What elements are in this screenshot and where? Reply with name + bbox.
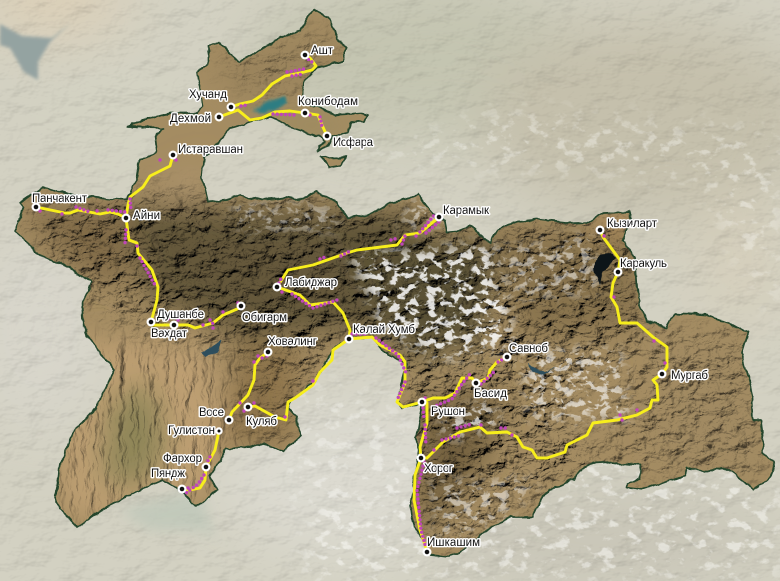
city labels: Каракуль <box>620 258 667 270</box>
city labels: Басид <box>474 388 507 400</box>
city labels: Дехмой <box>170 113 211 125</box>
city labels: Ашт <box>311 45 334 57</box>
city labels: Хорог <box>424 463 453 475</box>
city labels: Восе <box>199 407 224 419</box>
city labels: Конибодам <box>298 96 358 108</box>
lake: Karakul <box>593 254 616 285</box>
city labels: Калай Хумб <box>353 324 415 336</box>
city labels: Истаравшан <box>178 144 243 156</box>
road network: yellow highways <box>36 55 667 551</box>
lake: Kayrakkum reservoir <box>253 96 288 114</box>
city labels: Лабиджар <box>285 277 337 289</box>
lake: Yashilkul <box>528 362 555 374</box>
city labels: Карамык <box>443 205 490 217</box>
Aral-side lake area, upper left <box>0 22 72 80</box>
river valley wetland, south <box>120 490 240 555</box>
city labels: Куляб <box>246 416 277 428</box>
lake: Nurek reservoir <box>201 340 222 358</box>
city labels <box>32 45 708 549</box>
city labels: Савноб <box>509 343 548 355</box>
city labels: Кызиларт <box>607 218 658 230</box>
city labels: Хучанд <box>189 89 227 101</box>
city markers <box>33 52 665 555</box>
city labels: Гулистон <box>168 425 215 437</box>
road hazard markers: magenta dots <box>40 57 665 548</box>
city labels: Фархор <box>163 453 202 465</box>
city labels: Вахдат <box>151 328 188 340</box>
city labels: Айни <box>133 210 160 222</box>
city labels: Панчакент <box>32 193 88 205</box>
city labels: Душанбе <box>157 309 204 321</box>
city labels: Рушон <box>431 406 465 418</box>
city labels: Ховалинг <box>268 336 317 348</box>
city labels: Ишкашим <box>427 537 480 549</box>
city labels: Мургаб <box>671 370 708 382</box>
city labels: Обигарм <box>242 312 287 324</box>
city labels: Исфара <box>333 137 374 149</box>
city labels: Пяндж <box>151 468 185 480</box>
